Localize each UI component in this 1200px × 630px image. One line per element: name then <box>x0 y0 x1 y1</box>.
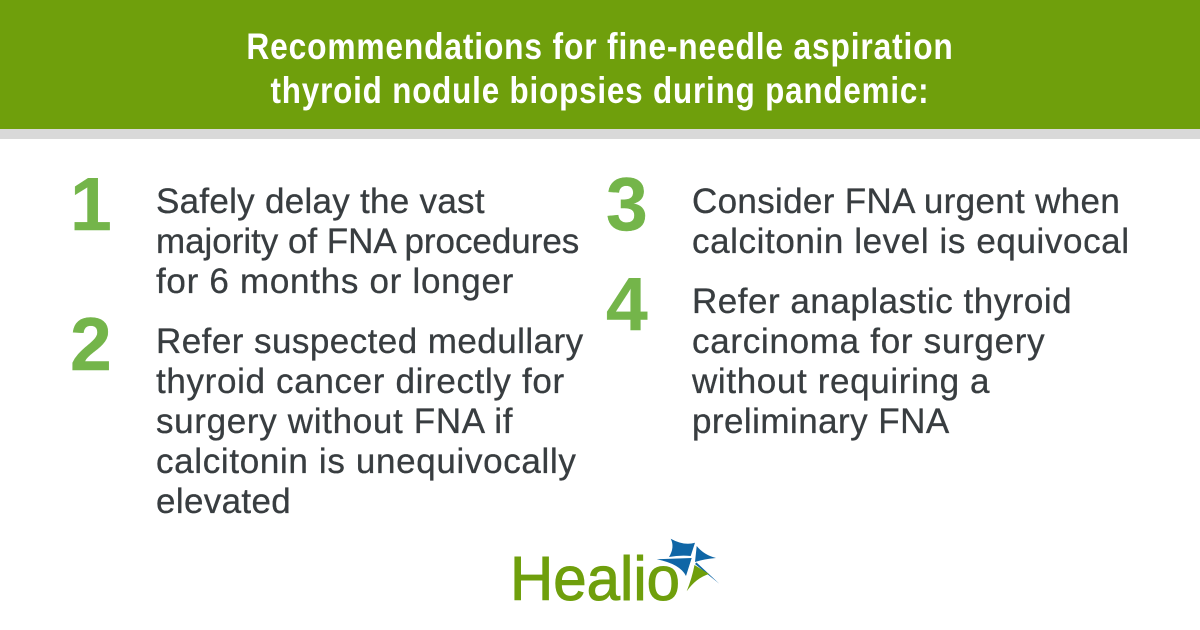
item 1 text: for 6 months or longer <box>156 262 514 301</box>
title: thyroid nodule biopsies during pandemic: <box>271 70 929 111</box>
item 4 text: without requiring a <box>692 362 990 401</box>
number 3: 3 <box>606 162 648 246</box>
item 1 text: Safely delay the vast <box>156 182 485 221</box>
number 2: 2 <box>70 302 112 386</box>
item 2 text: surgery without FNA if <box>156 402 513 441</box>
item 2 text <box>156 322 584 521</box>
item 3 text <box>692 182 1130 261</box>
item 4 text: Refer anaplastic thyroid <box>692 282 1072 321</box>
Healio logo <box>510 538 719 607</box>
number 1: 1 <box>70 162 112 246</box>
item 3 text: Consider FNA urgent when <box>692 182 1120 221</box>
item 2 text: calcitonin is unequivocally <box>156 442 577 481</box>
item 4 text: preliminary FNA <box>692 402 950 441</box>
item 2 text: thyroid cancer directly for <box>156 362 565 401</box>
item 1 text <box>156 182 579 301</box>
item 2 text: elevated <box>156 482 291 521</box>
item 3 text: calcitonin level is equivocal <box>692 222 1130 261</box>
title <box>246 26 954 111</box>
item 1 text: majority of FNA procedures <box>156 222 579 261</box>
title: Recommendations for fine-needle aspiration <box>246 26 954 67</box>
logo star <box>657 539 719 591</box>
item 4 text: carcinoma for surgery <box>692 322 1045 361</box>
item 2 text: Refer suspected medullary <box>156 322 584 361</box>
item 4 text <box>692 282 1072 441</box>
number 4: 4 <box>606 262 648 346</box>
header band <box>0 0 1200 129</box>
